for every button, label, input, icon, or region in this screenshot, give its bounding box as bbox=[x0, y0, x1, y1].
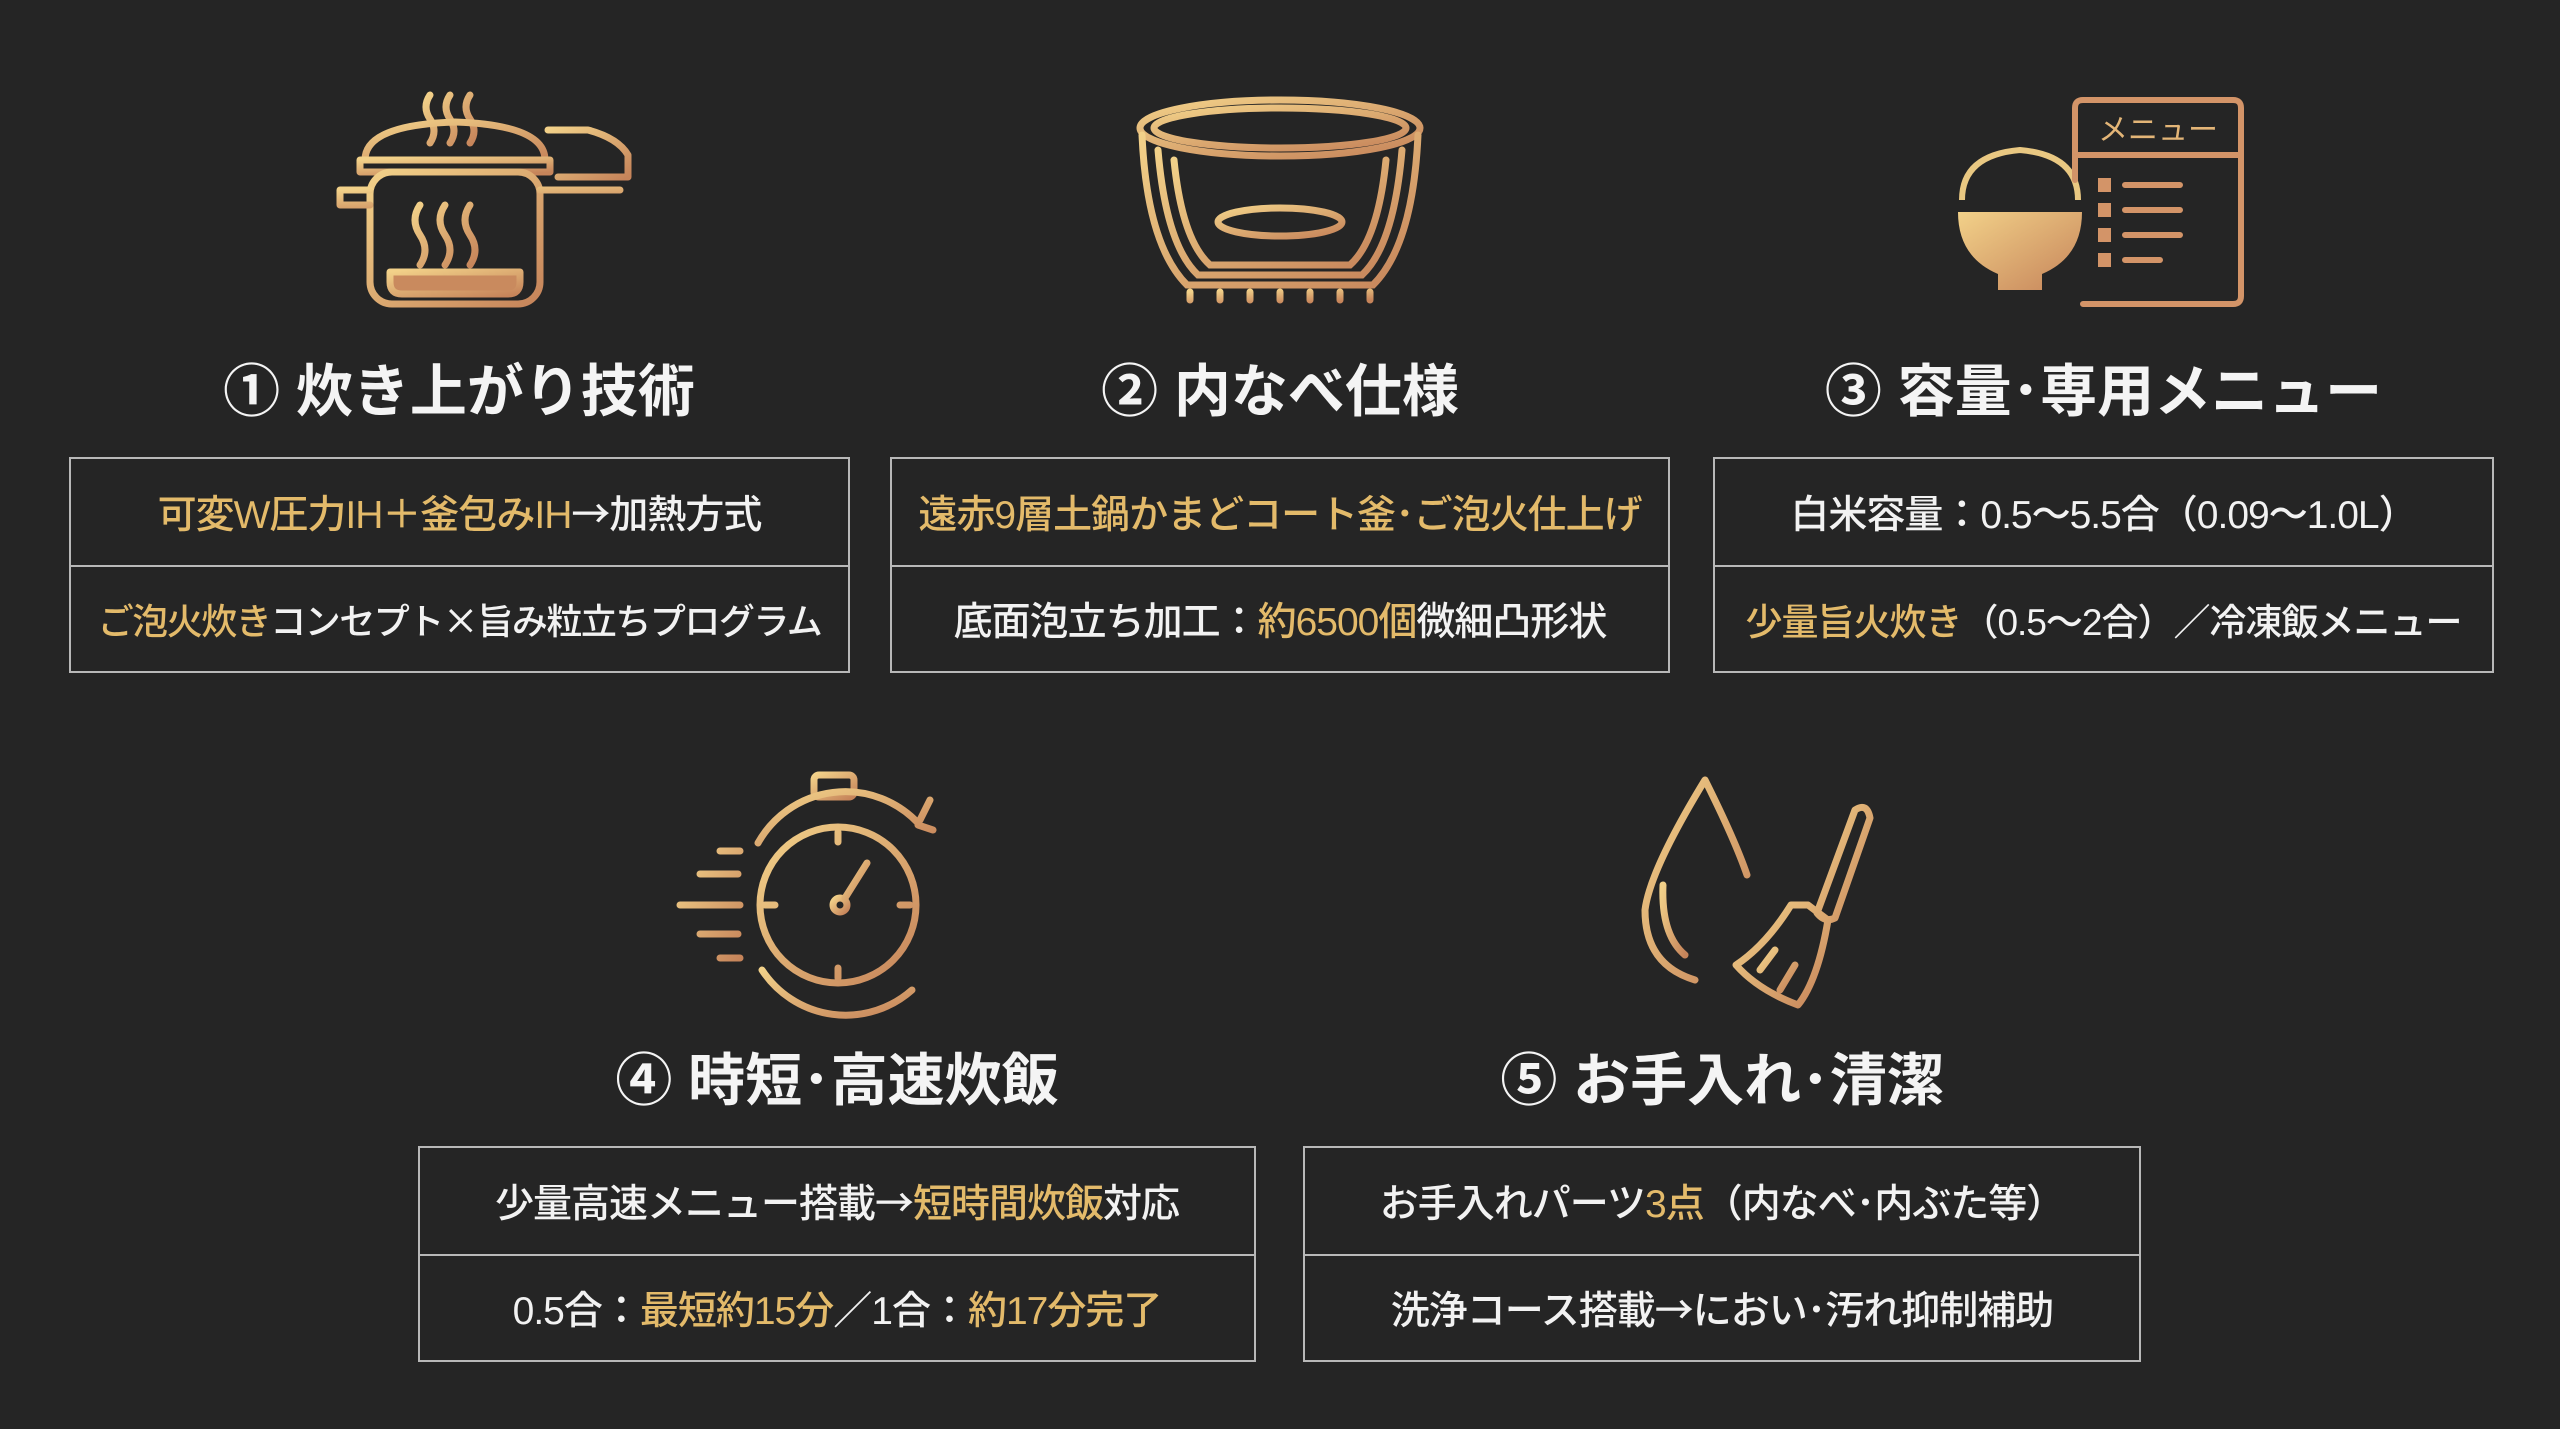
table 3 bbox=[1713, 457, 2494, 673]
table 1: 可変W圧力IH＋釜包みIH→加熱方式 bbox=[158, 484, 761, 540]
table 5 bbox=[1303, 1146, 2141, 1362]
table 3: 白米容量：0.5〜5.5合（0.09〜1.0L） bbox=[1790, 494, 2417, 537]
icon: drop and brush bbox=[1645, 780, 1870, 1005]
table 2: 遠赤9層土鍋かまどコート釜･ご泡火仕上げ bbox=[918, 494, 1642, 537]
table 5: 洗浄コース搭載→におい･汚れ抑制補助 bbox=[1391, 1280, 2053, 1336]
icon: rice bowl and menu bbox=[1958, 100, 2241, 304]
table 1: ご泡火炊きコンセプト×旨み粒立ちプログラム bbox=[98, 593, 821, 645]
icon: stopwatch bbox=[680, 775, 933, 1015]
table 4: 少量高速メニュー搭載→短時間炊飯対応 bbox=[495, 1173, 1179, 1229]
table 2 bbox=[890, 457, 1670, 673]
heading 2: ② 内なべ仕様 bbox=[1101, 360, 1459, 424]
icon: pressure cooker bbox=[340, 95, 628, 304]
table 2: 底面泡立ち加工：約6500個微細凸形状 bbox=[954, 601, 1606, 644]
table 1 bbox=[69, 457, 850, 673]
table 4: 0.5合：最短約15分／1合：約17分完了 bbox=[513, 1290, 1161, 1333]
heading 1: ① 炊き上がり技術 bbox=[223, 360, 695, 424]
icon: rice bowl and menu: メニュー bbox=[2098, 105, 2218, 149]
icon: inner pot bbox=[1140, 100, 1420, 300]
table 5: お手入れパーツ3点（内なべ･内ぶた等） bbox=[1380, 1183, 2064, 1226]
heading 5: ⑤ お手入れ･清潔 bbox=[1500, 1049, 1944, 1113]
heading 3: ③ 容量･専用メニュー bbox=[1825, 360, 2382, 424]
table 3: 少量旨火炊き（0.5〜2合）／冷凍飯メニュー bbox=[1745, 602, 2462, 643]
heading 4: ④ 時短･高速炊飯 bbox=[615, 1049, 1059, 1113]
table 4 bbox=[418, 1146, 1256, 1362]
